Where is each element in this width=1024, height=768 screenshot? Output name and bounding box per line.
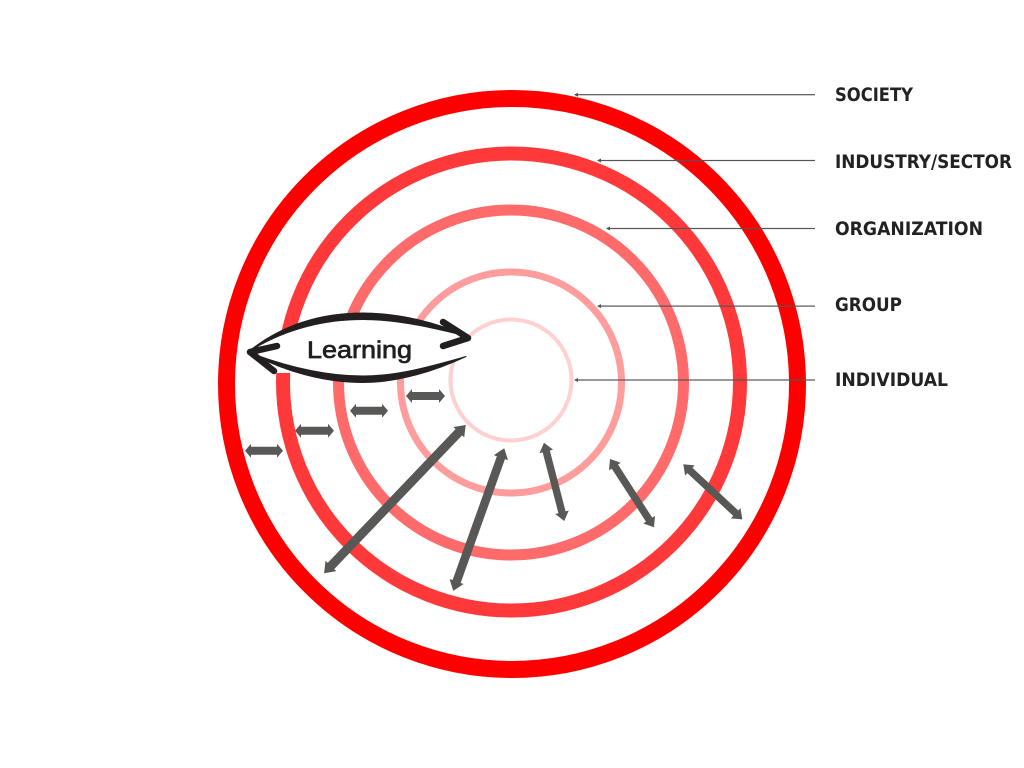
arrow: individual to society <box>319 420 471 578</box>
small horizontal double arrows <box>245 389 445 458</box>
learning arrowheads <box>250 322 468 371</box>
concentric rings <box>226 98 798 670</box>
ring: society <box>226 98 798 670</box>
label: organization: ORGANIZATION <box>835 218 983 240</box>
arrow: crossing organization ring <box>604 455 660 531</box>
label: individual: INDIVIDUAL <box>835 369 948 391</box>
learning arrow white fill <box>248 314 470 381</box>
leader: individual <box>574 378 815 382</box>
leader lines <box>574 93 815 382</box>
ring: group <box>400 272 622 493</box>
arrow: industry to organization <box>295 424 334 438</box>
ring: industry/sector <box>283 154 740 610</box>
arrow: crossing group ring <box>537 441 571 523</box>
leader: society <box>574 93 815 97</box>
learning double arrow <box>248 313 470 382</box>
arrow: crossing industry ring <box>679 459 747 524</box>
label: society: SOCIETY <box>835 84 913 106</box>
long diagonal double arrows <box>319 420 747 593</box>
arrow: organization to group <box>350 404 388 418</box>
learning text: Learning <box>307 337 412 364</box>
arrow: society to industry <box>245 444 283 458</box>
arrow: individual to industry <box>446 446 511 593</box>
leader: industry/sector <box>597 158 815 162</box>
leader: group <box>597 304 815 308</box>
leader: organization <box>606 226 815 230</box>
ring: organization <box>338 210 684 555</box>
level labels <box>835 84 1012 391</box>
arrow: group to individual <box>406 389 445 403</box>
ring: individual <box>450 320 572 440</box>
learning arrow curved strokes <box>248 313 470 382</box>
label: group: GROUP <box>835 294 902 316</box>
